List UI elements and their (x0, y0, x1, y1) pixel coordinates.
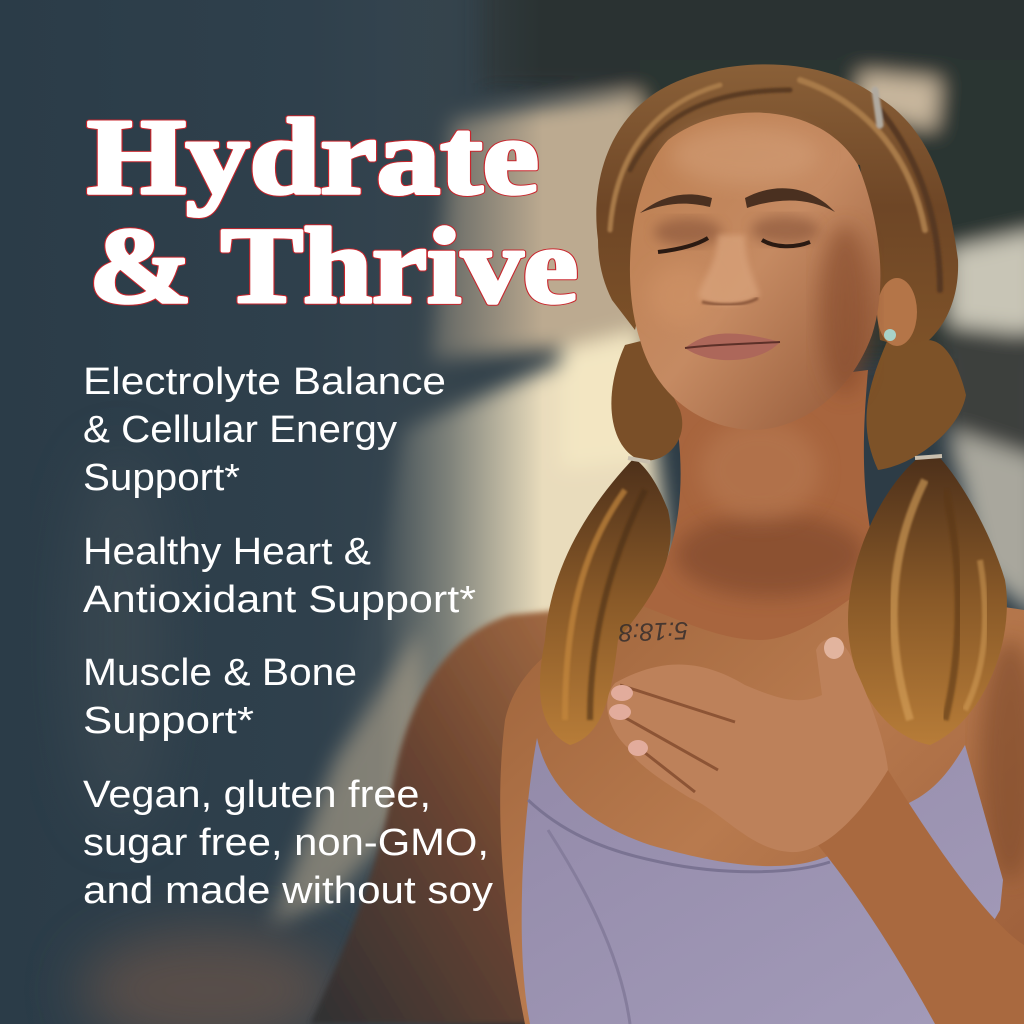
benefit: electrolyte balance: Support* (83, 457, 240, 499)
title fill: & Thrive (89, 207, 578, 326)
benefit: dietary claims: sugar free, non-GMO, (83, 822, 489, 864)
benefit: electrolyte balance: Electrolyte Balance (83, 361, 446, 403)
right braid (848, 330, 1007, 745)
tank top (522, 738, 1003, 1024)
title: Hydrate & Thrive (87, 98, 578, 326)
title fill (87, 98, 578, 326)
benefit: muscle and bone: Support* (83, 700, 254, 742)
hand on chest (607, 637, 888, 852)
benefit: dietary claims: and made without soy (83, 870, 493, 912)
title outline (87, 98, 578, 326)
lips (685, 333, 780, 360)
benefit: dietary claims (83, 774, 493, 912)
title fill: Hydrate (87, 98, 539, 217)
benefit: electrolyte balance (83, 361, 446, 499)
left braid (540, 340, 682, 745)
closed eyes (654, 218, 722, 246)
benefit: heart and antioxidant: Antioxidant Support* (83, 579, 476, 621)
benefit: muscle and bone (83, 652, 357, 742)
hair strands (610, 80, 940, 290)
benefit: electrolyte balance: & Cellular Energy (83, 409, 397, 451)
neck (640, 370, 880, 640)
face (630, 113, 880, 430)
back arm (blurred shoulder, left) (310, 610, 560, 1024)
benefit: heart and antioxidant (83, 531, 476, 621)
ear and earring (877, 278, 917, 346)
hair crown (596, 64, 958, 350)
chest tattoo: 5:18:8 (618, 616, 689, 646)
forearm (805, 770, 1024, 1024)
title outline: Hydrate (87, 98, 539, 217)
benefit: heart and antioxidant: Healthy Heart & (83, 531, 371, 573)
benefit: muscle and bone: Muscle & Bone (83, 652, 357, 694)
left upper puff (611, 340, 682, 461)
benefit list (83, 361, 493, 912)
nose (698, 235, 760, 305)
torso and chest (500, 540, 1024, 1024)
eyebrows (640, 194, 712, 213)
right upper puff (866, 330, 966, 470)
left lower ponytail (540, 458, 671, 745)
title outline: & Thrive (89, 207, 578, 326)
benefit: dietary claims: Vegan, gluten free, (83, 774, 431, 816)
woman photo illustration (310, 64, 1024, 1024)
right lower ponytail (848, 458, 1007, 745)
